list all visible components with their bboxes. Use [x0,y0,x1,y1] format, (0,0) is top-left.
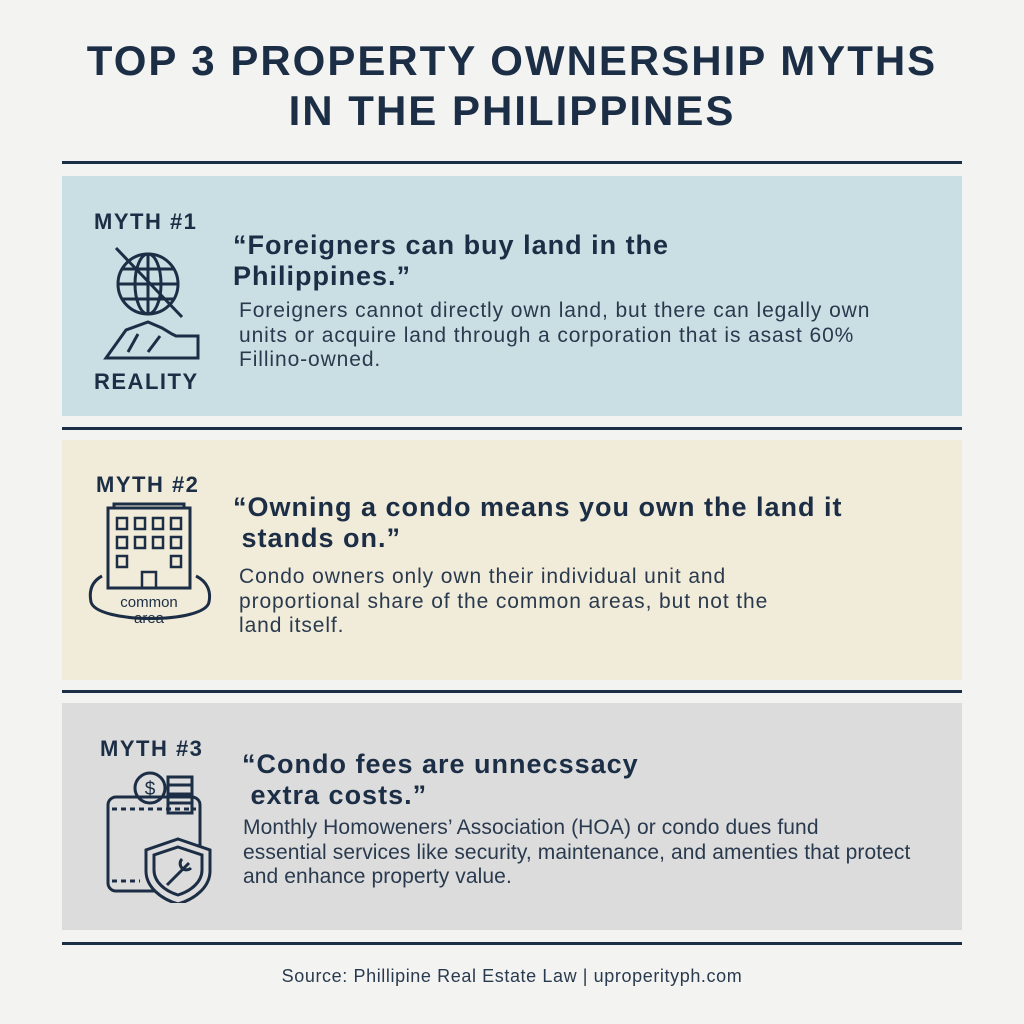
myth 3 reality text: and enhance property value. [243,865,512,888]
myth 2 quote: stands on.” [242,523,401,553]
title: IN THE PHILIPPINES [289,87,735,134]
myth 1 reality text: Foreigners cannot directly own land, but there can legally own [239,299,870,322]
title [87,37,937,134]
panel: myth 3 [62,703,962,930]
myth 3 reality text: Monthly Homoweners’ Association (HOA) or condo dues fund [243,816,819,839]
myth 1 quote: “Foreigners can buy land in the [233,230,669,260]
myth 2 reality text: Condo owners only own their individual unit and [239,565,726,588]
myth 2 reality text [239,565,768,637]
myth 1 reality text: units or acquire land through a corporation that is asast 60% [239,324,854,346]
common area label: area [134,610,164,627]
myth 1 reality text [239,299,870,371]
panel: myth 2 [62,440,962,680]
source footer: Source: Phillipine Real Estate Law | uproperityph.com [282,966,742,986]
myth 3 reality text [243,816,910,888]
icon: wallet coins shield: $ [145,779,156,800]
myth 2 reality text: proportional share of the common areas, but not the [239,590,768,612]
myth 1 label: MYTH #1 [94,209,197,234]
myth 2 quote [233,492,843,553]
common area label [120,594,178,627]
icon: wallet coins shield [106,772,212,903]
myth 2 reality text: land itself. [239,614,344,637]
myth 3 quote: extra costs.” [250,780,427,810]
icon: globe crossed and land [103,247,200,360]
myth 3 quote: “Condo fees are unnecssacy [242,749,639,779]
common area label: common [120,594,178,611]
myth 1 reality text: Fillino-owned. [239,348,381,371]
myth 3 quote [242,749,639,810]
icon: condo building with common area [88,502,212,620]
myth 3 label: MYTH #3 [100,736,203,761]
myth 1 quote: Philippines.” [233,261,411,291]
reality label: REALITY [94,369,199,394]
myth 1 quote [233,230,669,291]
title: TOP 3 PROPERTY OWNERSHIP MYTHS [87,37,937,84]
myth 2 quote: “Owning a condo means you own the land it [233,492,843,522]
myth 2 label: MYTH #2 [96,472,199,497]
myth 3 reality text: essential services like security, maintenance, and amenties that protect [243,840,910,864]
panel: myth 1 [62,176,962,416]
